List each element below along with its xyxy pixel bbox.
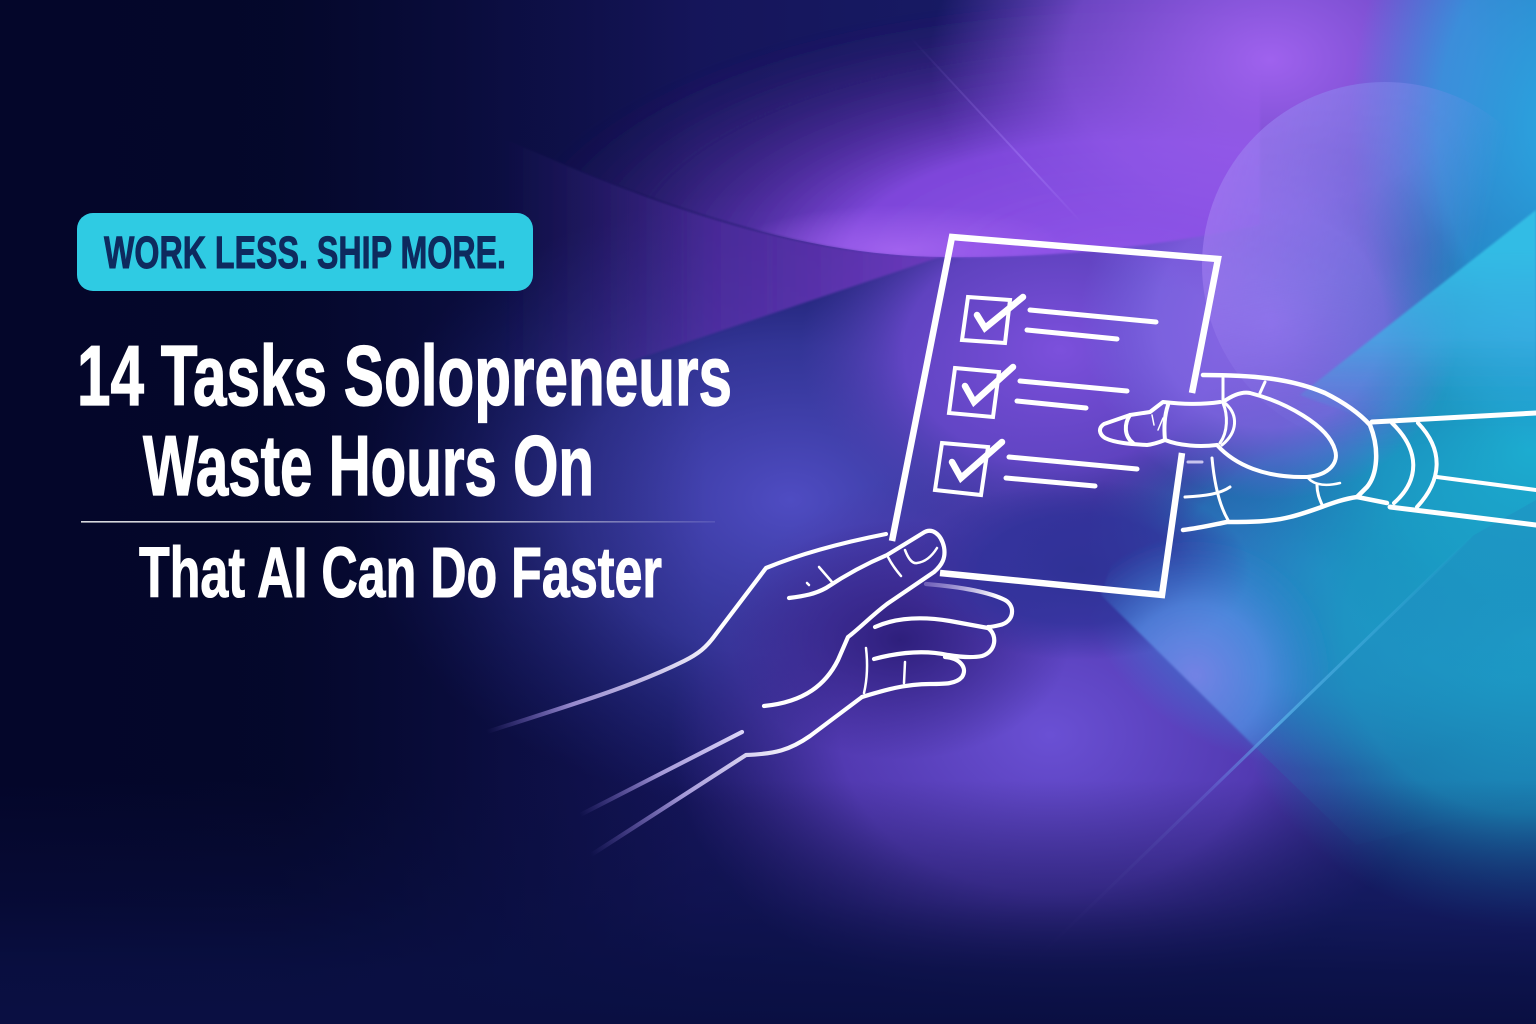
tagline pill: WORK LESS. SHIP MORE. (104, 227, 506, 278)
tagline pill (77, 213, 533, 291)
icon: human hand holding the page (487, 531, 1012, 855)
subtitle: That AI Can Do Faster (139, 534, 662, 613)
icon: checklist document (892, 237, 1218, 595)
icon: robot hand pointing at the page (1100, 375, 1536, 530)
divider (81, 521, 715, 523)
title: Waste Hours On (143, 419, 594, 514)
title: 14 Tasks Solopreneurs (77, 329, 732, 424)
title (77, 329, 732, 514)
